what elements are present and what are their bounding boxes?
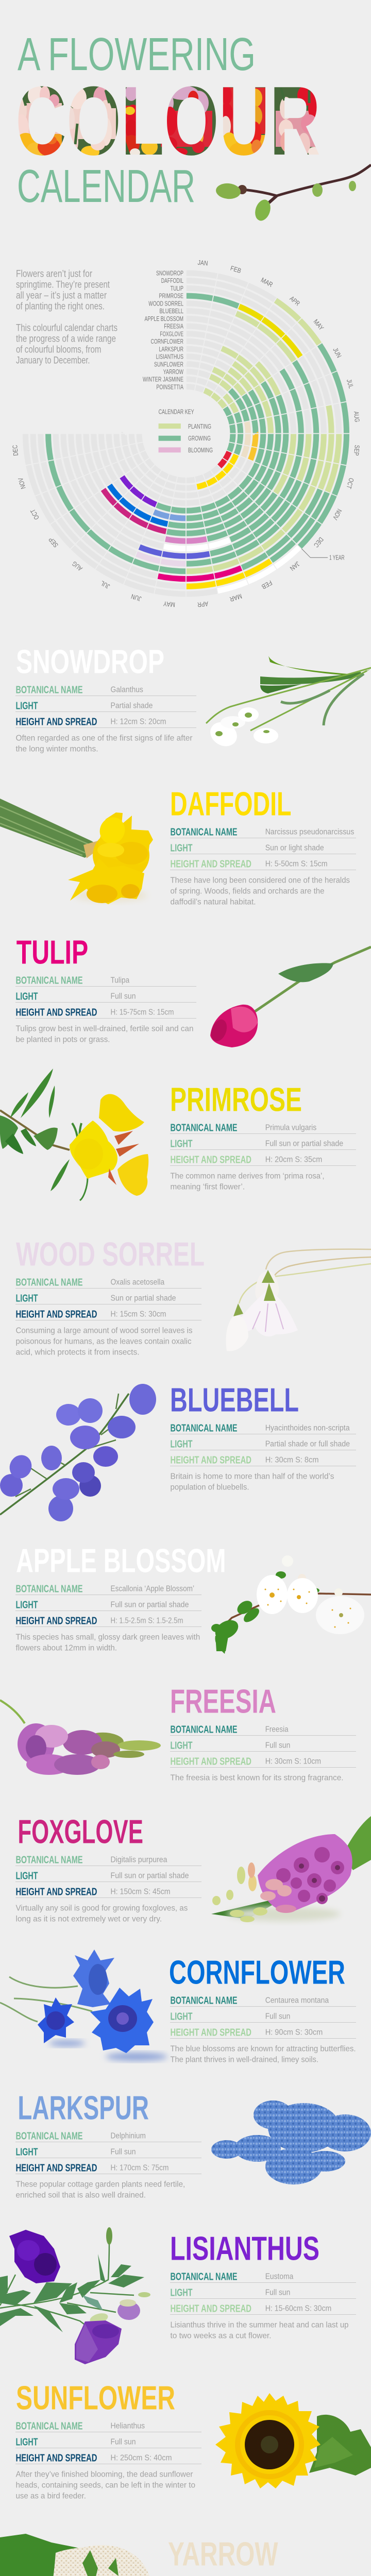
- details table: snowdrop: HEIGHT AND SPREAD: [15, 716, 97, 727]
- description: apple blossom: flowers about 12mm in width.: [15, 1643, 117, 1653]
- month labels: APR: [288, 295, 301, 308]
- flower name labels: YARROW: [163, 368, 183, 376]
- details table: snowdrop: Partial shade: [110, 702, 153, 710]
- flower name labels: WINTER JASMINE: [143, 376, 183, 383]
- description: freesia: The freesia is best known for its strong fragrance.: [170, 1773, 343, 1783]
- icon: freesia flowers: [0, 1700, 161, 1775]
- title: [15, 29, 321, 212]
- month labels: SEP: [352, 445, 361, 456]
- flower name labels: CORNFLOWER: [150, 338, 183, 345]
- month labels: OCT: [345, 477, 356, 489]
- details table: snowdrop: BOTANICAL NAME: [15, 684, 82, 696]
- details table: bluebell: LIGHT: [170, 1438, 193, 1450]
- flower name labels: FREESIA: [164, 323, 183, 330]
- heading: yarrow: YARROW: [168, 2535, 278, 2573]
- flower name labels: WOOD SORREL: [148, 300, 183, 307]
- intro text: This colourful calendar charts: [16, 323, 117, 334]
- details table: daffodil: Narcissus pseudonarcissus: [265, 827, 355, 837]
- details table: wood sorrel: Oxalis acetosella: [110, 1278, 165, 1287]
- panel: snowdrop: [15, 643, 371, 753]
- month labels: [11, 259, 361, 608]
- details table: foxglove: Full sun or partial shade: [110, 1871, 189, 1880]
- description: lisianthus: Lisianthus thrive in the summer heat and can last up: [170, 2320, 349, 2330]
- details table: freesia: Freesia: [265, 1725, 289, 1734]
- description: wood sorrel: Consuming a large amount of wood sorrel leaves is: [15, 1326, 193, 1335]
- details table: bluebell: H: 30cm S: 8cm: [265, 1456, 318, 1464]
- callout: 1 year: [301, 549, 344, 562]
- details table: sunflower: Full sun: [110, 2438, 136, 2446]
- heading: lisianthus: LISIANTHUS: [170, 2230, 319, 2267]
- flower name labels: [143, 270, 183, 391]
- details table: wood sorrel: BOTANICAL NAME: [15, 1277, 82, 1288]
- description: foxglove: long as it is not extremely wet or very dry.: [15, 1914, 162, 1924]
- month labels: FEB: [260, 579, 274, 591]
- heading: sunflower: SUNFLOWER: [16, 2379, 175, 2416]
- heading: tulip: TULIP: [16, 934, 88, 971]
- details table: lisianthus: H: 15-60cm S: 30cm: [265, 2304, 331, 2313]
- details table: cornflower: [170, 1995, 356, 2038]
- details table: lisianthus: HEIGHT AND SPREAD: [170, 2303, 251, 2314]
- details table: tulip: BOTANICAL NAME: [15, 975, 82, 986]
- description: apple blossom: [15, 1633, 200, 1653]
- description: sunflower: After they’ve finished blooming, the dead sunflower: [15, 2470, 193, 2479]
- legend: calendar key: GROWING: [188, 435, 211, 442]
- month labels: SEP: [47, 536, 60, 549]
- icon: larkspur cluster: [211, 2100, 371, 2184]
- legend: calendar key: PLANTING: [188, 423, 211, 430]
- icon: snowdrop flowers: [206, 656, 371, 751]
- heading: primrose: PRIMROSE: [170, 1081, 302, 1118]
- intro text: January to December.: [16, 355, 90, 366]
- details table: freesia: Full sun: [265, 1741, 290, 1750]
- details table: sunflower: BOTANICAL NAME: [15, 2420, 82, 2432]
- details table: freesia: LIGHT: [170, 1740, 193, 1752]
- details table: lisianthus: [170, 2271, 356, 2314]
- description: foxglove: [15, 1904, 188, 1924]
- details table: tulip: Tulipa: [110, 976, 130, 985]
- description: snowdrop: Often regarded as one of the first signs of life after: [15, 734, 193, 743]
- heading: larkspur: LARKSPUR: [18, 2089, 149, 2127]
- details table: primrose: Primula vulgaris: [265, 1123, 317, 1132]
- details table: primrose: H: 20cm S: 35cm: [265, 1155, 322, 1164]
- flower name labels: SUNFLOWER: [154, 361, 183, 368]
- details table: daffodil: Sun or light shade: [265, 844, 324, 852]
- details table: larkspur: LIGHT: [15, 2146, 38, 2158]
- details table: bluebell: BOTANICAL NAME: [170, 1423, 237, 1434]
- details table: bluebell: Partial shade or full shade: [265, 1439, 350, 1449]
- details table: primrose: BOTANICAL NAME: [170, 1122, 237, 1133]
- panel: foxglove: [15, 1812, 371, 1924]
- details table: daffodil: [170, 826, 356, 870]
- description: sunflower: [15, 2470, 195, 2501]
- description: foxglove: Virtually any soil is good for growing foxgloves, as: [15, 1904, 188, 1912]
- intro text: springtime. They’re present: [16, 279, 110, 291]
- details table: cornflower: BOTANICAL NAME: [170, 1995, 237, 2006]
- growing arcs: [26, 273, 346, 594]
- icon: bluebell flowers: [0, 1384, 156, 1521]
- heading: foxglove: FOXGLOVE: [18, 1812, 143, 1851]
- details table: sunflower: Helianthus: [110, 2421, 145, 2431]
- details table: snowdrop: LIGHT: [15, 701, 38, 712]
- month labels: NOV: [331, 507, 343, 521]
- details table: snowdrop: [15, 684, 196, 727]
- description: tulip: [15, 1024, 194, 1044]
- details table: cornflower: H: 90cm S: 30cm: [265, 2028, 323, 2037]
- details table: larkspur: H: 170cm S: 75cm: [110, 2164, 169, 2172]
- panel: yarrow: [0, 2534, 356, 2576]
- details table: lisianthus: Eustoma: [265, 2272, 294, 2281]
- details table: foxglove: HEIGHT AND SPREAD: [15, 1887, 97, 1898]
- details table: freesia: BOTANICAL NAME: [170, 1724, 237, 1735]
- details table: apple blossom: [15, 1584, 201, 1627]
- details table: primrose: Full sun or partial shade: [265, 1140, 343, 1148]
- icon: apple blossom branch: [211, 1555, 371, 1654]
- panel: sunflower: [15, 2379, 371, 2501]
- panel: larkspur: [15, 2089, 371, 2200]
- details table: larkspur: Full sun: [110, 2147, 136, 2157]
- description: snowdrop: [15, 734, 193, 753]
- month labels: JUN: [331, 346, 343, 359]
- heading: wood sorrel: WOOD SORREL: [16, 1235, 205, 1273]
- icon: foxglove spike: [211, 1816, 371, 1922]
- callout: 1 year: 1 YEAR: [329, 554, 344, 562]
- planting arcs: [26, 273, 346, 594]
- month labels: AUG: [71, 560, 84, 572]
- legend: calendar key: CALENDAR KEY: [159, 408, 194, 415]
- details table: wood sorrel: H: 15cm S: 30cm: [110, 1310, 166, 1319]
- flower name labels: PRIMROSE: [159, 293, 183, 300]
- details table: foxglove: Digitalis purpurea: [110, 1856, 167, 1864]
- heading: freesia: FREESIA: [170, 1683, 276, 1720]
- description: larkspur: [15, 2180, 185, 2200]
- heading: bluebell: BLUEBELL: [170, 1381, 299, 1419]
- details table: sunflower: HEIGHT AND SPREAD: [15, 2452, 97, 2464]
- details table: cornflower: LIGHT: [170, 2011, 193, 2023]
- month labels: JUL: [99, 579, 111, 590]
- details table: apple blossom: LIGHT: [15, 1599, 38, 1611]
- description: cornflower: The blue blossoms are known for attracting butterflies.: [170, 2044, 356, 2054]
- panel: wood sorrel: [15, 1235, 371, 1357]
- details table: sunflower: H: 250cm S: 40cm: [110, 2453, 172, 2463]
- month labels: MAY: [312, 318, 326, 332]
- details table: daffodil: LIGHT: [170, 843, 193, 854]
- flower name labels: SNOWDROP: [156, 270, 183, 277]
- description: wood sorrel: [15, 1326, 193, 1357]
- description: primrose: meaning ‘first flower’.: [170, 1183, 245, 1191]
- details table: freesia: H: 30cm S: 10cm: [265, 1757, 321, 1766]
- details table: snowdrop: Galanthus: [110, 685, 143, 694]
- description: larkspur: These popular cottage garden plants need fertile,: [15, 2180, 185, 2189]
- intro text: the progress of a wide range: [16, 334, 116, 344]
- month labels: JUL: [345, 378, 355, 389]
- flower name labels: BLUEBELL: [160, 308, 183, 315]
- details table: sunflower: LIGHT: [15, 2437, 38, 2448]
- details table: larkspur: [15, 2131, 201, 2174]
- details table: tulip: [15, 975, 196, 1018]
- description: lisianthus: to two weeks as a cut flower.: [170, 2332, 271, 2340]
- description: snowdrop: the long winter months.: [15, 745, 98, 753]
- rings: one arc per flower: [26, 273, 346, 594]
- description: bluebell: [170, 1472, 334, 1492]
- panel: cornflower: [0, 1950, 356, 2064]
- details table: apple blossom: Full sun or partial shade: [110, 1600, 189, 1609]
- details table: foxglove: [15, 1855, 201, 1898]
- intro text: Flowers aren’t just for: [16, 269, 93, 279]
- details table: freesia: [170, 1724, 356, 1767]
- icon: wood sorrel flowers: [226, 1249, 371, 1351]
- details table: apple blossom: H: 1.5-2.5m S: 1.5-2.5m: [110, 1617, 183, 1625]
- month labels: MAR: [260, 276, 274, 289]
- month labels: DEC: [11, 445, 20, 456]
- details table: foxglove: LIGHT: [15, 1870, 38, 1882]
- panel: daffodil: [0, 785, 356, 907]
- details table: lisianthus: LIGHT: [170, 2287, 193, 2299]
- month labels: AUG: [352, 411, 361, 422]
- details table: wood sorrel: Sun or partial shade: [110, 1294, 176, 1302]
- intro text: [16, 269, 117, 366]
- legend: calendar key: [159, 408, 213, 454]
- details table: wood sorrel: LIGHT: [15, 1293, 38, 1304]
- chart: radial flowering calendar: [11, 259, 361, 608]
- description: lisianthus: [170, 2320, 349, 2340]
- details table: cornflower: Centaurea montana: [265, 1996, 329, 2005]
- panel: apple blossom: [15, 1541, 371, 1654]
- details table: bluebell: Hyacinthoides non-scripta: [265, 1424, 350, 1432]
- description: bluebell: population of bluebells.: [170, 1483, 249, 1492]
- description: tulip: be planted in pots or grass.: [15, 1036, 110, 1044]
- description: daffodil: [170, 876, 350, 907]
- details table: larkspur: Delphinium: [110, 2132, 146, 2140]
- details table: apple blossom: Escallonia ‘Apple Blossom’: [110, 1585, 194, 1593]
- icon: budding twig: [215, 165, 371, 223]
- details table: wood sorrel: HEIGHT AND SPREAD: [15, 1309, 97, 1320]
- description: cornflower: [170, 2044, 356, 2064]
- month labels: JAN: [289, 560, 301, 572]
- title: CALENDAR: [17, 161, 195, 212]
- details table: bluebell: [170, 1423, 356, 1466]
- details table: daffodil: BOTANICAL NAME: [170, 826, 237, 838]
- details table: snowdrop: H: 12cm S: 20cm: [110, 717, 166, 726]
- details table: wood sorrel: [15, 1277, 201, 1320]
- details table: tulip: Full sun: [110, 992, 136, 1001]
- description: daffodil: of spring. Woods, fields and orchards are the: [170, 887, 325, 895]
- description: daffodil: These have long been considered one of the heralds: [170, 876, 350, 885]
- icon: tulip flower: [208, 947, 371, 1047]
- month labels: JAN: [197, 259, 208, 267]
- details table: daffodil: HEIGHT AND SPREAD: [170, 858, 251, 870]
- flower name labels: LISIANTHUS: [156, 353, 183, 361]
- heading: daffodil: DAFFODIL: [170, 785, 292, 822]
- intro text: all year – it’s just a matter: [16, 291, 107, 301]
- details table: apple blossom: BOTANICAL NAME: [15, 1584, 82, 1595]
- flower name labels: LARKSPUR: [159, 346, 183, 353]
- intro text: of colourful blooms, from: [16, 344, 101, 355]
- description: larkspur: enriched soil that is also well drained.: [15, 2191, 146, 2200]
- details table: primrose: LIGHT: [170, 1139, 193, 1150]
- flower name labels: FOXGLOVE: [160, 330, 183, 337]
- blooming arcs: [26, 273, 346, 594]
- heading: apple blossom: APPLE BLOSSOM: [16, 1541, 226, 1580]
- month labels: MAY: [163, 600, 176, 608]
- details table: foxglove: H: 150cm S: 45cm: [110, 1888, 170, 1896]
- icon: lisianthus flowers: [0, 2227, 150, 2364]
- description: apple blossom: This species has small, glossy dark green leaves with: [15, 1633, 200, 1641]
- details table: primrose: [170, 1122, 356, 1165]
- icon: daffodil bunch: [0, 799, 153, 904]
- panel: lisianthus: [0, 2227, 356, 2364]
- icon: cornflowers: [0, 1950, 167, 2061]
- flower name labels: APPLE BLOSSOM: [144, 315, 183, 323]
- details table: daffodil: H: 5-50cm S: 15cm: [265, 859, 328, 869]
- description: primrose: [170, 1172, 325, 1191]
- icon: yarrow bunch: [0, 2534, 150, 2576]
- description: sunflower: heads, containing seeds, can be left in the winter to: [15, 2481, 195, 2489]
- icon: sunflower: [215, 2393, 371, 2488]
- details table: primrose: HEIGHT AND SPREAD: [170, 1154, 251, 1165]
- details table: larkspur: HEIGHT AND SPREAD: [15, 2163, 97, 2174]
- panel: primrose: [0, 1069, 356, 1200]
- description: cornflower: The plant thrives in well-drained, limey soils.: [170, 2056, 318, 2064]
- details table: apple blossom: HEIGHT AND SPREAD: [15, 1616, 97, 1627]
- month labels: JUN: [130, 592, 142, 603]
- description: wood sorrel: acid, which protects it from insects.: [15, 1348, 139, 1357]
- details table: tulip: LIGHT: [15, 991, 38, 1003]
- details table: bluebell: HEIGHT AND SPREAD: [170, 1455, 251, 1466]
- details table: freesia: HEIGHT AND SPREAD: [170, 1756, 251, 1767]
- title: A FLOWERING: [18, 29, 256, 80]
- flower name labels: POINSETTIA: [157, 383, 183, 391]
- month labels: DEC: [312, 536, 325, 549]
- panel: tulip: [15, 934, 371, 1047]
- panel: freesia: [0, 1683, 356, 1783]
- details table: cornflower: HEIGHT AND SPREAD: [170, 2027, 251, 2038]
- icon: primrose flowers: [0, 1069, 148, 1200]
- description: tulip: Tulips grow best in well-drained, fertile soil and can: [15, 1024, 194, 1033]
- flower name labels: DAFFODIL: [161, 277, 183, 284]
- details table: tulip: H: 15-75cm S: 15cm: [110, 1008, 174, 1017]
- legend: calendar key: BLOOMING: [188, 447, 213, 454]
- month labels: MAR: [229, 592, 243, 603]
- details table: lisianthus: Full sun: [265, 2289, 290, 2297]
- description: primrose: The common name derives from ‘prima rosa’,: [170, 1172, 325, 1181]
- details table: foxglove: BOTANICAL NAME: [15, 1855, 82, 1866]
- details table: larkspur: BOTANICAL NAME: [15, 2131, 82, 2142]
- details table: tulip: HEIGHT AND SPREAD: [15, 1007, 97, 1018]
- month labels: OCT: [29, 508, 41, 521]
- description: bluebell: Britain is home to more than half of the world’s: [170, 1472, 334, 1481]
- description: daffodil: daffodil’s natural habitat.: [170, 897, 256, 907]
- month labels: NOV: [16, 477, 27, 490]
- intro text: of planting the right ones.: [16, 301, 105, 312]
- heading: snowdrop: SNOWDROP: [16, 643, 164, 680]
- month labels: FEB: [229, 264, 242, 275]
- month labels: APR: [197, 600, 209, 608]
- details table: sunflower: [15, 2420, 201, 2464]
- details table: cornflower: Full sun: [265, 2012, 290, 2021]
- panel: bluebell: [0, 1381, 356, 1521]
- details table: lisianthus: BOTANICAL NAME: [170, 2271, 237, 2282]
- description: sunflower: use as a bird feeder.: [15, 2492, 86, 2501]
- flower name labels: TULIP: [171, 285, 183, 292]
- description: wood sorrel: poisonous for humans, as the leaves contain oxalic: [15, 1337, 192, 1346]
